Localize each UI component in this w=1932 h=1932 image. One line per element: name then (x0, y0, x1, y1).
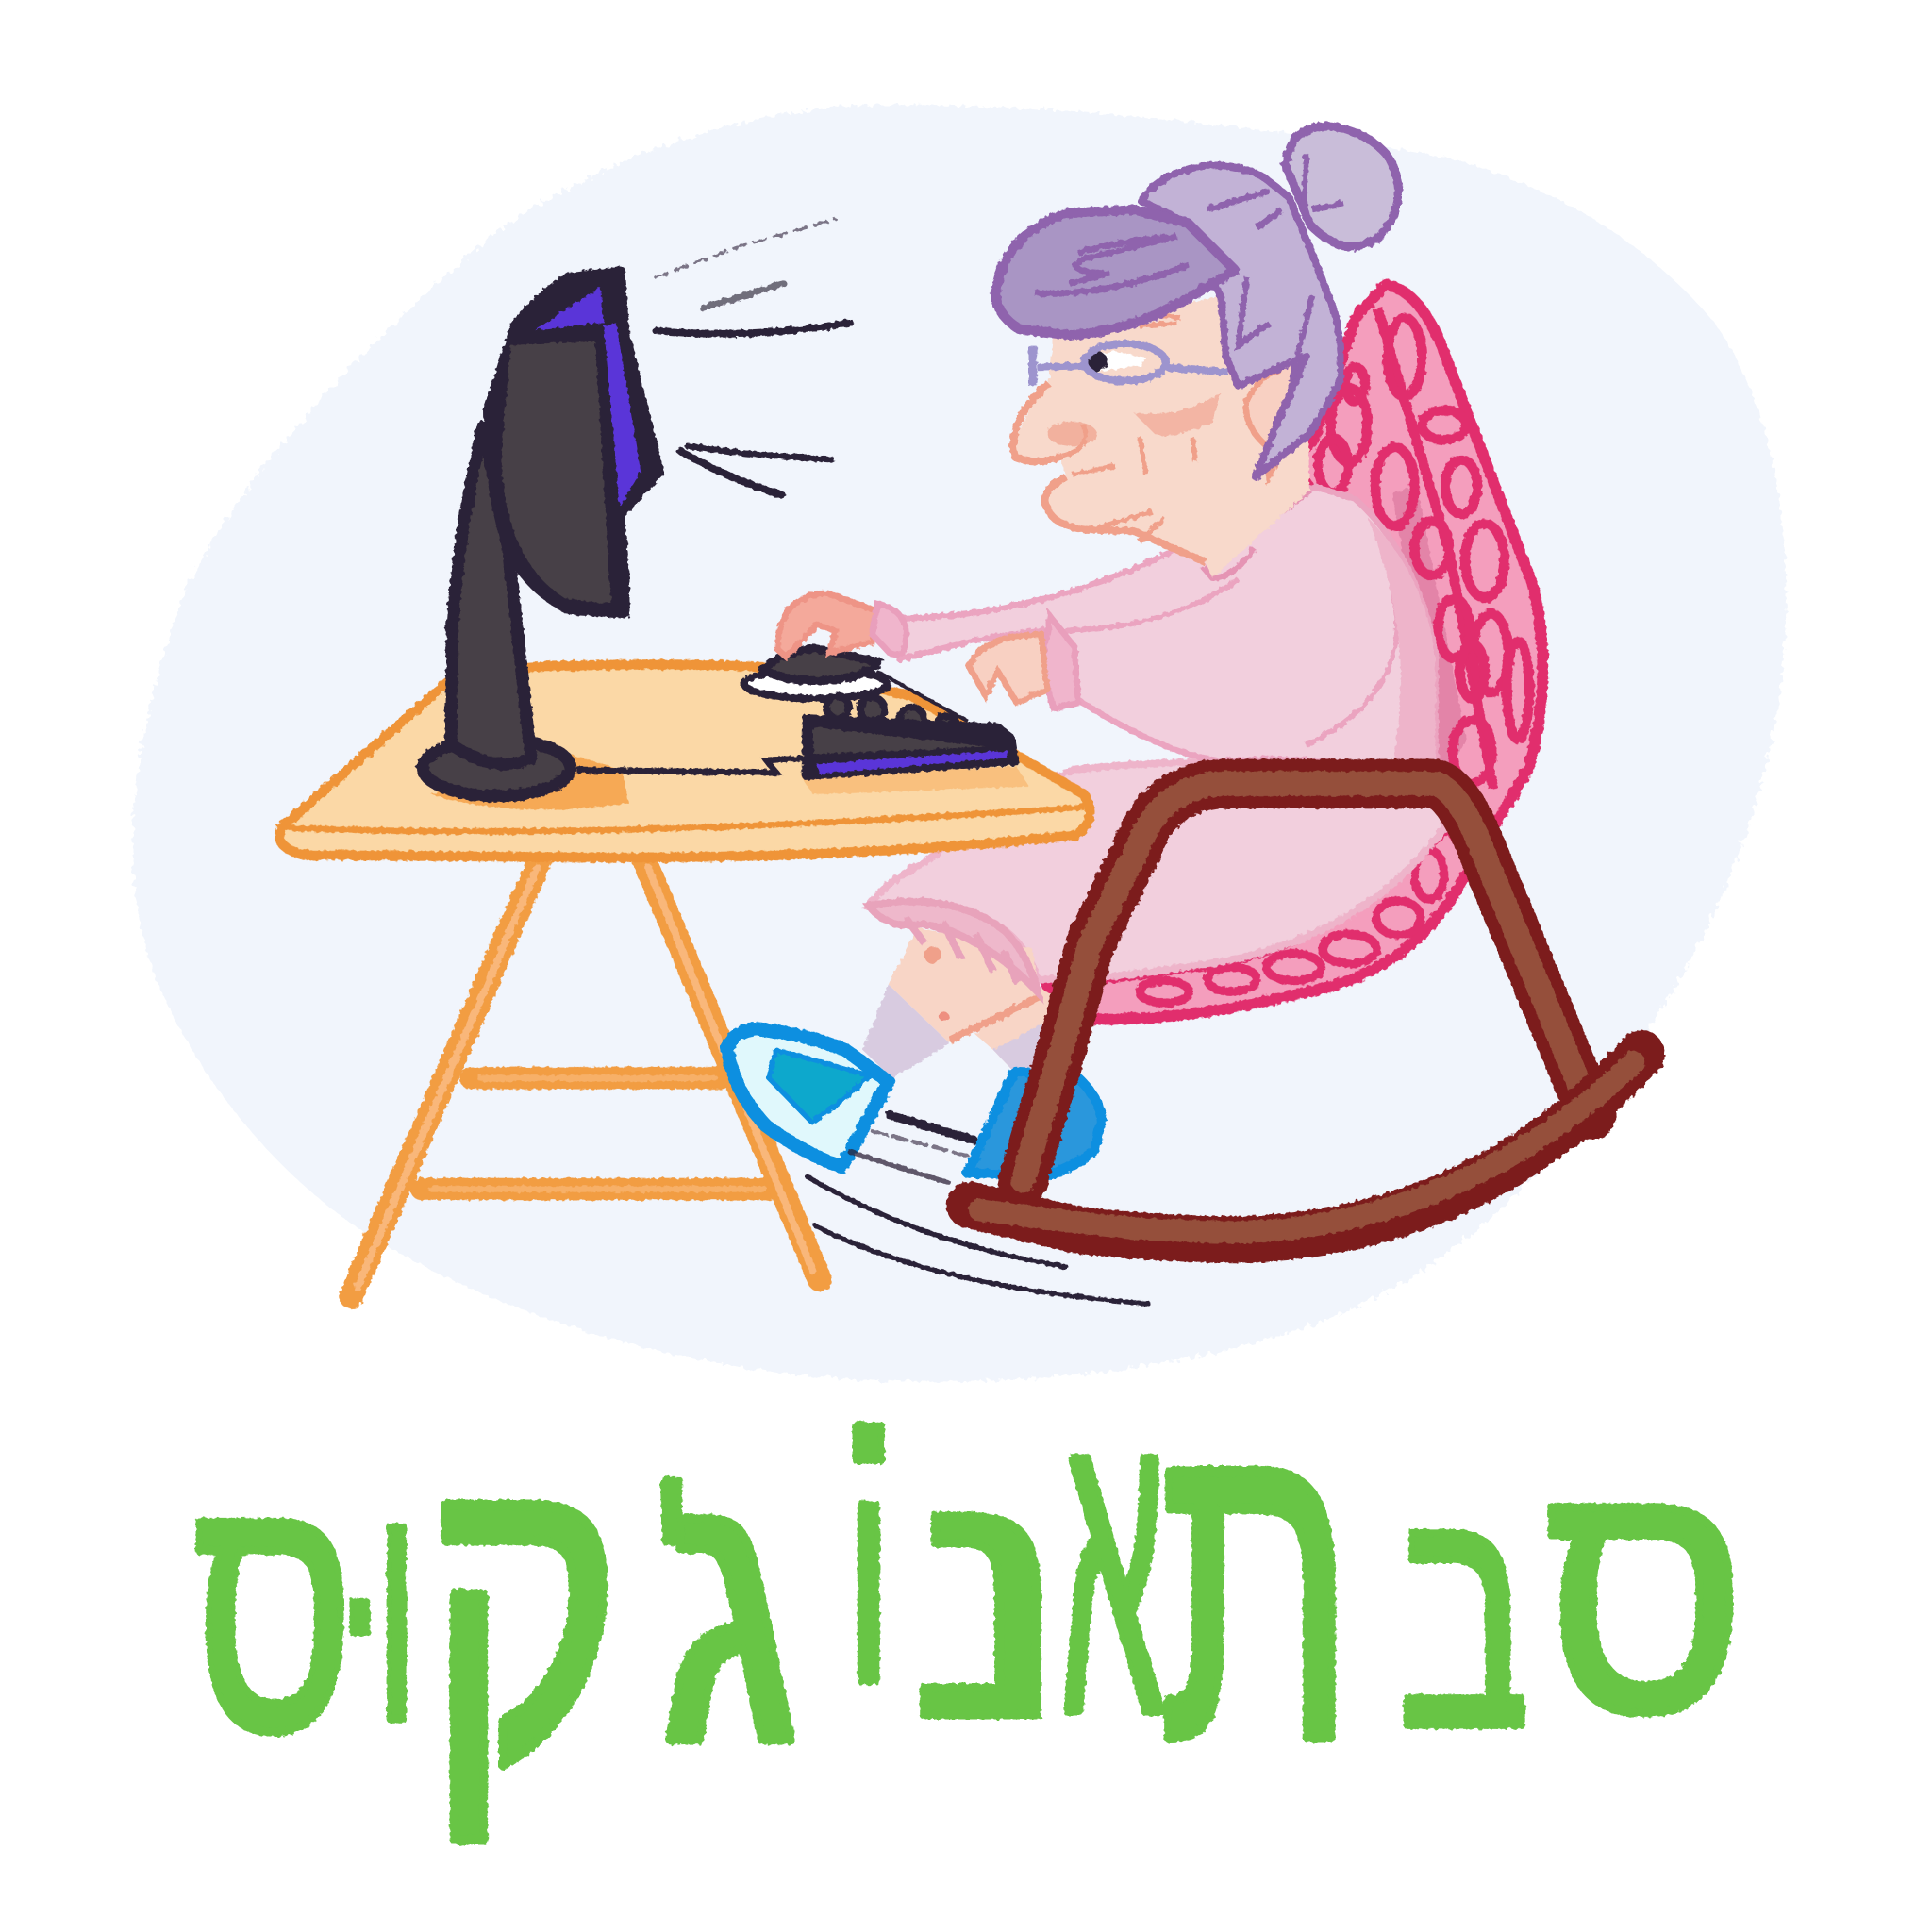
title: ס (192, 1417, 355, 1803)
title: . (831, 1170, 907, 1528)
monitor back panel (502, 341, 611, 604)
rocking chair frame (970, 784, 1641, 1240)
cheek (1134, 393, 1221, 436)
back leg (974, 986, 1059, 1072)
chair shadow on shoulder (1368, 518, 1436, 774)
hair side (1141, 165, 1341, 476)
seat pattern (1140, 850, 1444, 1003)
typing hand (969, 635, 1047, 702)
cable (576, 758, 810, 773)
mouse and pad (744, 648, 887, 699)
chair seat (1045, 825, 1473, 1020)
hair bun (1285, 125, 1399, 247)
monitor body (487, 270, 660, 615)
hair strands (1035, 154, 1343, 382)
neck and face (1014, 295, 1309, 578)
keyboard (576, 672, 1015, 776)
monitor stand (451, 426, 531, 764)
title: ב (1397, 1436, 1530, 1793)
title: . (336, 1376, 384, 1693)
computer monitor (423, 270, 660, 796)
dress lap (869, 761, 1444, 979)
chair back (1293, 285, 1542, 862)
rocker arch (1023, 784, 1592, 1180)
table top (279, 664, 1090, 858)
rocking chair back (1045, 285, 1542, 1020)
eye (1087, 351, 1146, 372)
collar (1205, 491, 1309, 578)
hem frills (906, 918, 1018, 983)
hand on mouse (777, 593, 877, 657)
sleeve cuffs (873, 604, 906, 655)
rocker base (970, 1054, 1641, 1240)
title: נ (910, 1415, 1069, 1786)
torso and sleeve (897, 487, 1436, 774)
table legs (351, 860, 820, 1296)
title: ק (425, 1375, 622, 1850)
glasses (1033, 343, 1228, 386)
monitor screen edge (535, 287, 641, 507)
ear (1246, 356, 1306, 475)
background blob (133, 105, 1786, 1381)
hair front swoop (995, 209, 1235, 335)
title: ו (375, 1428, 419, 1787)
keys (826, 696, 958, 738)
title: ' (653, 1420, 691, 1736)
title: ת (1158, 1336, 1355, 1832)
hair (995, 125, 1399, 476)
front leg (889, 928, 1040, 1043)
front shoe (727, 1029, 889, 1167)
motion lines at monitor (656, 219, 850, 495)
chair pattern (1319, 308, 1529, 789)
grandmother figure (862, 125, 1436, 1175)
face wrinkles (1062, 314, 1195, 542)
title: י (843, 1342, 894, 1932)
foot motion lines (808, 1115, 1148, 1304)
title: ס (1544, 1403, 1746, 1782)
dress hem (869, 901, 1038, 991)
back shoe (967, 1072, 1102, 1175)
illustration (192, 125, 1746, 1932)
title (192, 1170, 1746, 1932)
monitor base (423, 740, 571, 796)
title: ג (659, 1406, 800, 1818)
title: א (1060, 1331, 1165, 1800)
